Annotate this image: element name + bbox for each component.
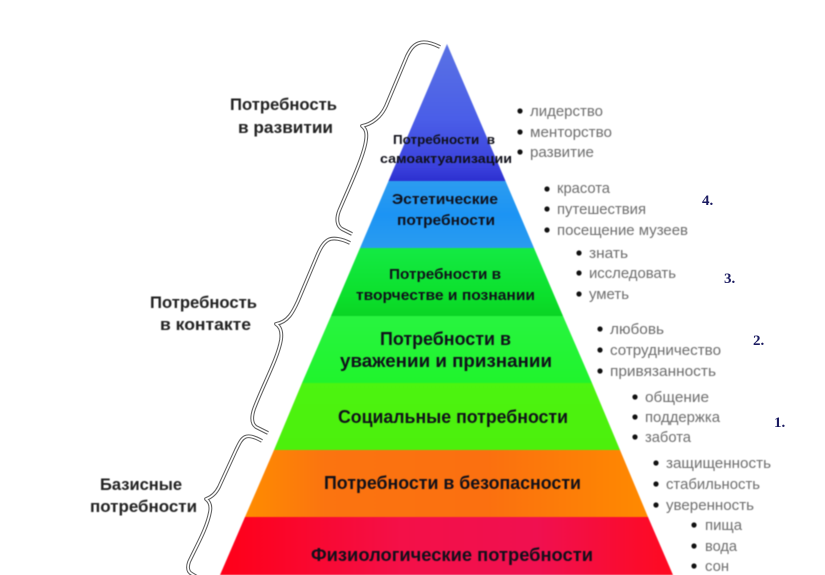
label: aesthetic needs: Эстетические <box>392 191 498 208</box>
label: aesthetic needs <box>392 191 498 229</box>
label: respect and recognition needs <box>340 329 552 371</box>
list: safety: стабильность <box>666 476 760 493</box>
list: respect: любовь <box>610 321 664 338</box>
label: safety needs: Потребности в безопасности <box>324 473 581 493</box>
list: safety: уверенность <box>666 497 754 514</box>
list: physiological: сон <box>705 558 729 575</box>
label: creativity and knowledge needs: Потребности в <box>389 266 501 283</box>
list: physiological <box>691 517 743 575</box>
list: safety <box>653 455 771 514</box>
label: creativity and knowledge needs <box>356 266 535 304</box>
label: creativity and knowledge needs: творчестве и познании <box>356 287 535 304</box>
number 3: 3. <box>724 271 736 287</box>
list: development <box>517 103 612 161</box>
bracket: basic needs <box>188 436 262 575</box>
list: respect: привязанность <box>610 363 716 380</box>
heading: development needs: Потребность <box>230 96 337 114</box>
label: self-actualization needs <box>380 132 512 166</box>
number 1: 1. <box>774 415 786 431</box>
heading: contact needs: Потребность <box>150 294 257 312</box>
list: physiological: пища <box>705 517 743 534</box>
list: aesthetic: посещение музеев <box>557 222 688 239</box>
list: knowledge: исследовать <box>589 265 676 282</box>
label: aesthetic needs: потребности <box>397 212 495 229</box>
pyramid <box>220 44 673 575</box>
label: self-actualization needs: самоактуализации <box>380 151 512 166</box>
tier: respect and recognition band <box>302 316 592 383</box>
list: development: развитие <box>530 144 594 161</box>
list: respect <box>597 321 721 380</box>
list: knowledge: знать <box>589 245 628 262</box>
label: self-actualization needs: Потребности в <box>393 132 495 147</box>
label: respect and recognition needs: Потребности в <box>380 329 511 349</box>
heading: contact needs: в контакте <box>160 316 251 334</box>
list: social: общение <box>645 389 709 406</box>
tier: social band <box>274 383 620 450</box>
list: knowledge: уметь <box>589 286 629 303</box>
tier: creativity and knowledge band <box>331 248 563 316</box>
list: development: лидерство <box>530 103 603 120</box>
label: physiological needs: Физиологические потребности <box>311 545 593 565</box>
heading: basic needs: Базисные <box>100 476 182 494</box>
heading: development needs <box>230 96 337 137</box>
label: respect and recognition needs: уважении и признании <box>340 351 552 371</box>
heading: contact needs <box>150 294 257 334</box>
list: aesthetic <box>544 180 688 239</box>
list: safety: защищенность <box>666 455 771 472</box>
bracket: contact needs <box>252 239 350 433</box>
heading: basic needs <box>90 476 197 516</box>
heading: development needs: в развитии <box>238 119 333 137</box>
bracket: development needs <box>337 42 440 234</box>
tier: safety band <box>245 450 648 517</box>
tier: self-actualization band <box>388 44 506 181</box>
number 2: 2. <box>753 333 764 349</box>
list: development: менторство <box>530 124 612 141</box>
list: physiological: вода <box>705 538 738 555</box>
tier: physiological band <box>220 517 673 575</box>
list: aesthetic: путешествия <box>557 201 646 218</box>
list: social: поддержка <box>645 409 721 426</box>
list: knowledge <box>576 245 676 303</box>
tier: aesthetic band <box>360 181 534 248</box>
heading: basic needs: потребности <box>90 498 197 516</box>
list: respect: сотрудничество <box>610 342 721 359</box>
list: social: забота <box>645 429 692 446</box>
list: aesthetic: красота <box>557 180 611 197</box>
list: social <box>632 389 721 446</box>
number 4: 4. <box>702 193 714 209</box>
label: social needs: Социальные потребности <box>338 407 568 427</box>
